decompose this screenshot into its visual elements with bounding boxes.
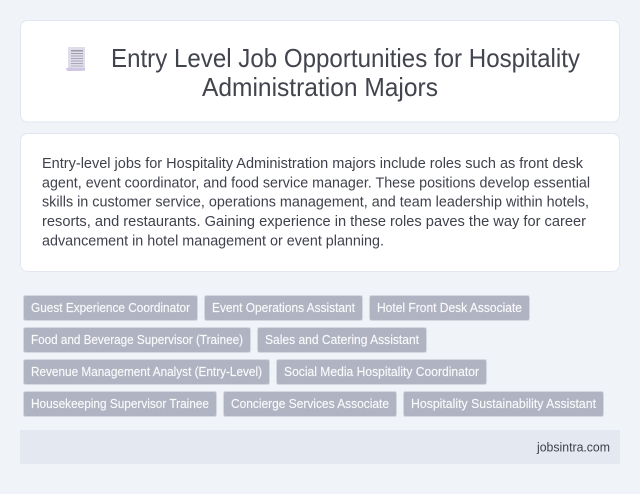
tag: Guest Experience Coordinator (31, 300, 191, 315)
heading: Administration Majors (202, 74, 438, 102)
tag (24, 360, 270, 384)
text block: summary paragraph: agent, event coordinator, and food service manager. These positions develop essential (42, 176, 590, 192)
tag: Housekeeping Supervisor Trainee (31, 396, 209, 411)
tag: Sales and Catering Assistant (265, 332, 419, 347)
heading (111, 45, 580, 102)
text block: summary paragraph: advancement in hotel management or event planning. (42, 234, 384, 250)
panel: summary card (20, 134, 620, 272)
text block: summary paragraph (42, 156, 590, 250)
text block: summary paragraph: resorts, and restaurants. Gaining experience in these roles paves the way for career (42, 214, 586, 230)
tag (24, 392, 216, 416)
footer bar (20, 430, 620, 464)
tag (276, 360, 486, 384)
tag (24, 328, 250, 352)
text block: summary paragraph: skills in customer service, operations management, and team leadership within hotels, (42, 194, 589, 210)
panel: title card (20, 20, 620, 122)
tag: Revenue Management Analyst (Entry-Level) (31, 364, 262, 379)
footer bar: jobsintra.com (536, 440, 610, 454)
tag (24, 296, 198, 320)
tag (224, 392, 396, 416)
tag list (24, 296, 604, 416)
text block: summary paragraph: Entry-level jobs for Hospitality Administration majors include roles such as front desk (42, 156, 584, 172)
tag: Social Media Hospitality Coordinator (284, 364, 480, 379)
tag (204, 296, 362, 320)
tag: Hotel Front Desk Associate (377, 300, 522, 315)
heading: Entry Level Job Opportunities for Hospitality (111, 45, 580, 73)
tag: Hospitality Sustainability Assistant (411, 396, 596, 411)
tag: Food and Beverage Supervisor (Trainee) (31, 332, 243, 347)
tag (370, 296, 530, 320)
tag: Concierge Services Associate (231, 396, 389, 411)
tag (258, 328, 426, 352)
tag (404, 392, 604, 416)
tag: Event Operations Assistant (212, 300, 355, 315)
icon: receipt scroll (66, 47, 85, 71)
